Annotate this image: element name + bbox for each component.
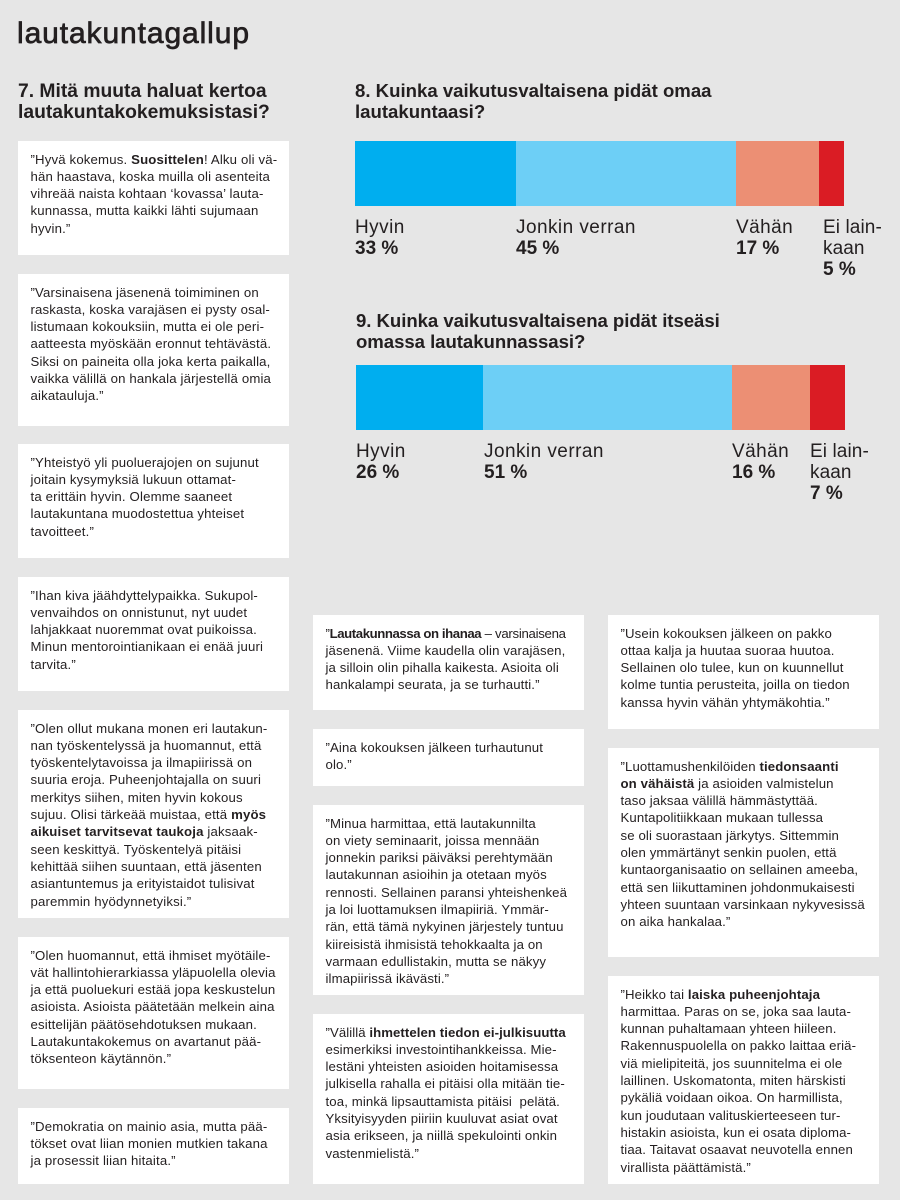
label: Jonkin verran: 51 %: [484, 462, 527, 483]
quote card: Ihan kiva jäähdyttelypaikka: tarvita.”: [30, 657, 76, 672]
chart: question 8 stacked bar: [355, 141, 882, 280]
quote card: Heikko tai laiska puheenjohtaja: ”Heikko tai laiska puheenjohtaja: [620, 986, 820, 1002]
title: lautakuntagallup: [17, 17, 250, 50]
quote card: Minua harmittaa: ja loi luottamuksen ilmapiiriä. Ymmär-: [326, 902, 549, 917]
quote card: Luottamushenkilöiden: olen ymmärtänyt senkin puolen, että: [620, 845, 837, 860]
quote card: Aina kokouksen jälkeen: ”Aina kokouksen jälkeen turhautunut: [326, 740, 543, 754]
quote card: Ihan kiva jäähdyttelypaikka: venvaihdos on onnistunut, nyt uudet: [30, 605, 247, 620]
quote card: Minua harmittaa: rennosti. Sellainen paransi yhteishenkeä: [326, 885, 567, 900]
label: Ei lainkaan: Ei lain-: [823, 217, 882, 238]
quote card: Välillä ihmettelen: esimerkiksi investointihankkeissa. Mie-: [326, 1042, 557, 1057]
quote card: Olen huomannut: ”Olen huomannut, että ihmiset myötäile-: [30, 948, 271, 962]
quote card: Heikko tai laiska puheenjohtaja: histakin asioista, kun ei osata diploma-: [620, 1125, 851, 1140]
quote card: Demokratia: [18, 1108, 289, 1184]
quote card: Heikko tai laiska puheenjohtaja: virallista päättämistä.”: [620, 1160, 751, 1175]
label: Hyvin: [355, 217, 405, 259]
label: Vähän: [732, 441, 789, 483]
label: Hyvin: [356, 441, 406, 483]
quote card: Olen huomannut: Lautakuntakokemus on avartanut pää-: [30, 1034, 261, 1049]
quote card: Välillä ihmettelen: julkisella rahalla ei pitäisi olla mitään tie-: [326, 1076, 565, 1091]
quote card: Luottamushenkilöiden: Kuntapolitiikkaan mukaan tullessa: [620, 810, 823, 825]
quote card: Heikko tai laiska puheenjohtaja: viä mielipiteitä, jos suunnitelma ei ole: [620, 1056, 842, 1071]
quote card: Minua harmittaa: jonnekin pariksi päiväksi perehtymään: [326, 850, 553, 865]
quote card: Luottamushenkilöiden: se oli suorastaan järkytys. Sittemmin: [620, 828, 839, 843]
quote card: Heikko tai laiska puheenjohtaja: tiaa. Taitavat osaavat neuvotella ennen: [620, 1142, 853, 1157]
chart: question 9 stacked bar: [356, 365, 869, 504]
quote card: Minua harmittaa: varmaan edullistakin, mutta se näkyy: [326, 954, 546, 969]
segment: Jonkin verran 45 %: [516, 141, 736, 206]
quote card: Yhteistyö: lautakuntana muodostettua yhteiset: [30, 506, 244, 521]
quote card: Ihan kiva jäähdyttelypaikka: Minun mentorointianikaan ei enää juuri: [30, 639, 263, 654]
quote card: Hyvä kokemus: kunnassa, mutta kaikki lähti sujumaan: [30, 203, 259, 218]
quote card: Yhteistyö: [18, 444, 289, 558]
quote card: Varsinaisena jäsenenä: vaikka välillä on hankala järjestellä omia: [30, 371, 271, 386]
quote card: Aina kokouksen jälkeen: olo.”: [326, 757, 352, 772]
quote card: Välillä ihmettelen: ”Välillä ihmettelen tiedon ei-julkisuutta: [326, 1024, 566, 1040]
label: Jonkin verran: [516, 217, 636, 259]
quote card: Olen ollut mukana: [18, 710, 289, 918]
quote card: Yhteistyö: tavoitteet.”: [30, 524, 94, 539]
quote card: Luottamushenkilöiden: ”Luottamushenkilöiden tiedonsaanti: [620, 758, 839, 774]
quote card: Välillä ihmettelen: Yksityisyyden piiriin kuuluvat asiat ovat: [326, 1111, 558, 1126]
quote card: Demokratia: ”Demokratia on mainio asia, mutta pää-: [30, 1118, 267, 1134]
quote card: Ihan kiva jäähdyttelypaikka: lahjakkaat nuoremmat ovat puikoissa.: [30, 622, 257, 637]
quote card: Lautakunnassa on ihanaa: [313, 615, 584, 710]
quote card: Ihan kiva jäähdyttelypaikka: [18, 577, 289, 691]
quote card: Heikko tai laiska puheenjohtaja: kunnan puhaltamaan yhteen hiileen.: [620, 1021, 836, 1036]
label: Hyvin: 26 %: [356, 462, 399, 483]
quote card: Hyvä kokemus: vihreää naista kohtaan ‘kovassa’ lauta-: [30, 186, 264, 201]
quote card: Olen ollut mukana: ”Olen ollut mukana monen eri lautakun-: [30, 720, 267, 736]
heading: question 9: 9. Kuinka vaikutusvaltaisena pidät itseäsi: [356, 310, 720, 331]
quote card: Usein kokouksen jälkeen: ottaa kalja ja huutaa suoraa huutoa.: [620, 643, 835, 658]
quote card: Varsinaisena jäsenenä: [18, 274, 289, 426]
quote card: Luottamushenkilöiden: että sen liikuttaminen johdonmukaisesti: [620, 880, 855, 895]
label: Ei lainkaan: 5 %: [823, 259, 856, 280]
heading: question 8: lautakuntaasi?: [355, 101, 485, 122]
quote card: Heikko tai laiska puheenjohtaja: [608, 976, 879, 1184]
quote card: Olen ollut mukana: merkitys siihen, miten hyvin kokous: [30, 790, 243, 805]
segment: Hyvin 33 %: [355, 141, 516, 206]
quote card: Olen huomannut: esittelijän päätösehdotuksen mukaan.: [30, 1017, 257, 1032]
quote card: Usein kokouksen jälkeen: kanssa hyvin vähän yhtymäkohtia.”: [620, 695, 830, 710]
quote card: Usein kokouksen jälkeen: ”Usein kokouksen jälkeen on pakko: [620, 626, 832, 640]
quote card: Varsinaisena jäsenenä: raskasta, koska varajäsen ei pysty osal-: [30, 302, 270, 317]
quote card: Usein kokouksen jälkeen: Sellainen olo tulee, kun on kuunnellut: [620, 660, 844, 675]
quote card: Olen ollut mukana: paremmin hyödynnetyiksi.”: [30, 894, 191, 909]
quote card: Olen huomannut: ja että puoluekuri estää jopa keskustelun: [30, 982, 275, 997]
quote card: Hyvä kokemus: [18, 141, 289, 255]
heading: question 7: 7. Mitä muuta haluat kertoa: [18, 81, 267, 102]
quote card: Olen ollut mukana: aikuiset tarvitsevat taukoja jaksaak-: [30, 824, 258, 839]
heading: question 9: omassa lautakunnassasi?: [356, 331, 585, 352]
quote card: Varsinaisena jäsenenä: aikatauluja.”: [30, 388, 104, 403]
heading: question 8: 8. Kuinka vaikutusvaltaisena pidät omaa: [355, 80, 712, 101]
quote card: Hyvä kokemus: hyvin.”: [30, 221, 70, 236]
label: Hyvin: Hyvin: [356, 441, 406, 462]
label: Ei lainkaan: 7 %: [810, 483, 843, 504]
quote card: Varsinaisena jäsenenä: ”Varsinaisena jäsenenä toimiminen on: [30, 284, 259, 300]
quote card: Luottamushenkilöiden: [608, 748, 879, 957]
quote card: Välillä ihmettelen: lestäni yhteisten asioiden hoitamisessa: [326, 1059, 558, 1074]
label: Vähän: [736, 217, 793, 259]
quote card: Yhteistyö: ta erittäin hyvin. Olemme saaneet: [30, 489, 232, 504]
segment: Ei lainkaan 7 %: [810, 365, 845, 430]
quote card: Olen huomannut: [18, 937, 289, 1089]
quote card: Aina kokouksen jälkeen: [313, 729, 584, 786]
segment: Ei lainkaan 5 %: [819, 141, 844, 206]
quote card: Heikko tai laiska puheenjohtaja: pykäliä voidaan oikoa. On harmillista,: [620, 1090, 843, 1105]
label: Vähän: 16 %: [732, 462, 775, 483]
quote card: Lautakunnassa on ihanaa: jäsenenä. Viime kaudella olin varajäsen,: [326, 643, 565, 658]
label: Jonkin verran: [484, 441, 604, 483]
label: Jonkin verran: Jonkin verran: [484, 441, 604, 462]
quote card: Varsinaisena jäsenenä: listumaan kokouksiin, mutta ei ole peri-: [30, 319, 264, 334]
heading: question 7: [18, 81, 270, 123]
label: Hyvin: 33 %: [355, 238, 398, 259]
label: Ei lainkaan: kaan: [823, 238, 865, 259]
label: Ei lainkaan: kaan: [810, 462, 852, 483]
quote card: Minua harmittaa: kiireisistä ihmisistä tehokkaalta ja on: [326, 937, 543, 952]
quote card: Lautakunnassa on ihanaa: ”Lautakunnassa on ihanaa – varsinaisena: [326, 626, 566, 640]
heading: question 9: [356, 310, 720, 352]
label: Jonkin verran: 45 %: [516, 238, 559, 259]
quote card: Luottamushenkilöiden: taso jaksaa välillä hämmästyttää.: [620, 793, 818, 808]
segment: Vähän 16 %: [732, 365, 810, 430]
quote card: Varsinaisena jäsenenä: Siksi on paineita olla joka kerta paikalla,: [30, 354, 270, 369]
quote card: Heikko tai laiska puheenjohtaja: laillinen. Uskomatonta, miten härskisti: [620, 1073, 846, 1088]
label: Jonkin verran: Jonkin verran: [516, 217, 636, 238]
quote card: Heikko tai laiska puheenjohtaja: Rakennuspuolella on pakko laittaa eriä-: [620, 1038, 856, 1053]
quote card: Hyvä kokemus: ”Hyvä kokemus. Suosittelen! Alku oli vä-: [30, 152, 277, 166]
quote card: Minua harmittaa: rän, että tämä nykyinen järjestely tuntuu: [326, 919, 564, 934]
quote card: Yhteistyö: joitain kysymyksiä lukuun ottamat-: [30, 472, 236, 487]
quote card: Välillä ihmettelen: toa, minkä lipsauttamista pitäisi pelätä.: [326, 1094, 560, 1109]
label: Hyvin: Hyvin: [355, 217, 405, 238]
quote card: Lautakunnassa on ihanaa: ja silloin olin pihalla kaikesta. Asioita oli: [326, 660, 559, 675]
quote card: Demokratia: tökset ovat liian monien mutkien takana: [30, 1136, 268, 1151]
quote card: Minua harmittaa: ilmapiirissä ikävästi.”: [326, 971, 449, 986]
quote card: Välillä ihmettelen: [313, 1014, 584, 1184]
quote card: Olen ollut mukana: asiantuntemus ja erityistaidot tulisivat: [30, 876, 255, 891]
label: Vähän: 17 %: [736, 238, 779, 259]
label: Ei lainkaan: [823, 217, 882, 280]
label: Vähän: Vähän: [732, 441, 789, 462]
quote card: Olen ollut mukana: nan työskentelyssä ja huomannut, että: [30, 738, 261, 753]
quote card: Olen huomannut: vät hallintohierarkiassa yläpuolella olevia: [30, 965, 276, 980]
quote card: Varsinaisena jäsenenä: aatteesta myöskään eronnut tehtävästä.: [30, 336, 271, 351]
quote card: Usein kokouksen jälkeen: [608, 615, 879, 729]
quote card: Ihan kiva jäähdyttelypaikka: ”Ihan kiva jäähdyttelypaikka. Sukupol-: [30, 588, 258, 602]
quote card: Olen ollut mukana: suuria eroja. Puheenjohtajalla on suuri: [30, 772, 261, 787]
quote card: Minua harmittaa: lautakunnan asioihin ja otetaan myös: [326, 867, 547, 882]
quote card: Olen ollut mukana: työskentelytavoissa ja ilmapiirissä on: [30, 755, 252, 770]
quote card: Usein kokouksen jälkeen: kolme tuntia perusteita, joilla on tiedon: [620, 677, 850, 692]
quote card: Luottamushenkilöiden: yhteen suuntaan varsinkaan nykyvesissä: [620, 897, 865, 912]
quote card: Lautakunnassa on ihanaa: hankalampi seurata, ja se turhautti.”: [326, 677, 540, 692]
quote card: Olen huomannut: asioista. Asioista päätetään melkein aina: [30, 999, 275, 1014]
segment: Vähän 17 %: [736, 141, 819, 206]
quote card: Minua harmittaa: on viety seminaarit, joissa mennään: [326, 833, 539, 848]
label: Ei lainkaan: Ei lain-: [810, 441, 869, 462]
quote card: Luottamushenkilöiden: on aika hankalaa.”: [620, 914, 730, 929]
quote card: Olen huomannut: töksenteon käytännön.”: [30, 1051, 171, 1066]
label: Ei lainkaan: [810, 441, 869, 504]
heading: question 7: lautakuntakokemuksistasi?: [18, 102, 270, 123]
quote card: Demokratia: ja prosessit liian hitaita.”: [30, 1153, 176, 1168]
quote card: Yhteistyö: ”Yhteistyö yli puoluerajojen on sujunut: [30, 454, 259, 470]
quote card: Olen ollut mukana: sujuu. Olisi tärkeää muistaa, että myös: [30, 807, 266, 822]
quote card: Luottamushenkilöiden: on vähäistä ja asioiden valmistelun: [620, 776, 834, 791]
segment: Hyvin 26 %: [356, 365, 483, 430]
quote card: Välillä ihmettelen: vastenmielistä.”: [326, 1146, 419, 1161]
quote card: Hyvä kokemus: hän haastava, koska muilla oli asenteita: [30, 169, 270, 184]
label: Vähän: Vähän: [736, 217, 793, 238]
quote card: Heikko tai laiska puheenjohtaja: harmittaa. Paras on se, joka saa lauta-: [620, 1004, 851, 1019]
quote card: Minua harmittaa: ”Minua harmittaa, että lautakunnilta: [326, 816, 536, 830]
quote card: Olen ollut mukana: seen keskittyä. Työskentelyä pitäisi: [30, 842, 241, 857]
quote card: Olen ollut mukana: kehittää siihen suuntaan, että jäsenten: [30, 859, 262, 874]
quote card: Heikko tai laiska puheenjohtaja: kun joudutaan valituskierteeseen tur-: [620, 1108, 840, 1123]
quote card: Välillä ihmettelen: asia erikseen, ja niillä spekulointi onkin: [326, 1128, 557, 1143]
quote card: Minua harmittaa: [313, 805, 584, 995]
heading: question 8: [355, 80, 712, 122]
segment: Jonkin verran 51 %: [483, 365, 732, 430]
quote card: Luottamushenkilöiden: kuntaorganisaatio on sellainen ameeba,: [620, 862, 858, 877]
